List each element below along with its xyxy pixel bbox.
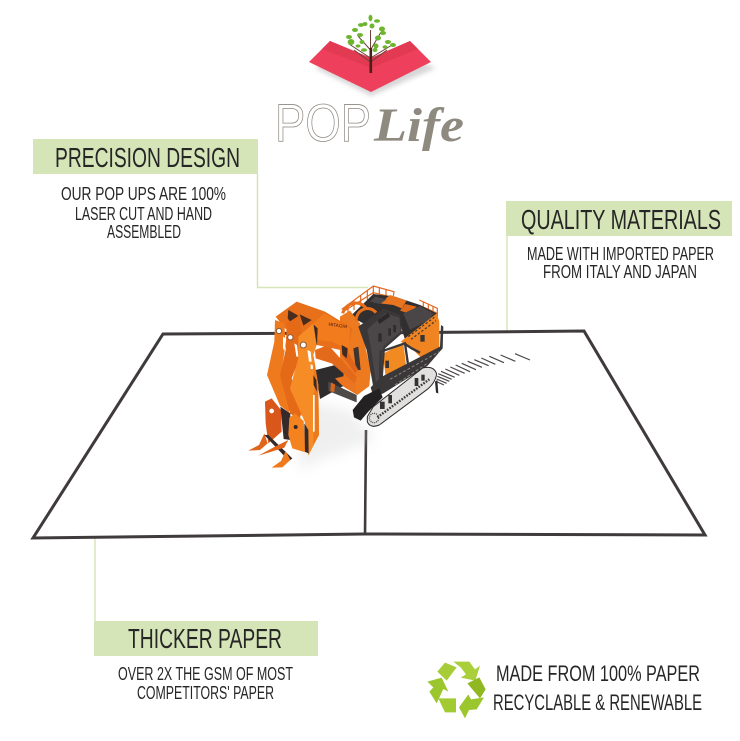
heading band: precision design: PRECISION DESIGN [55, 142, 240, 173]
callout: thicker paper [94, 621, 318, 703]
boom and bucket: HITACHI [328, 322, 347, 329]
orange rear shell [340, 311, 371, 395]
text: quality body [527, 244, 714, 282]
text: precision body: LASER CUT AND HAND [75, 204, 212, 224]
heading band: precision design [33, 139, 258, 174]
right orange panel [401, 313, 439, 360]
bucket left plate [265, 398, 282, 443]
middle arm [280, 315, 303, 419]
railing [342, 286, 437, 319]
logo wordmark Life: Life [373, 99, 464, 152]
front tooth [272, 451, 290, 468]
boom front plate [313, 313, 350, 350]
middle tooth [258, 440, 288, 456]
linkage bars [315, 345, 357, 383]
soft shadow [300, 400, 375, 470]
dark tower [358, 308, 402, 387]
recycling message [427, 661, 702, 718]
centre orange panel [383, 343, 406, 379]
text: thicker paper body [118, 664, 293, 703]
text: precision body [61, 184, 226, 242]
text: precision body: ASSEMBLED [107, 222, 181, 242]
rear cut-outs [353, 347, 361, 370]
cut shadow ticks [437, 354, 530, 385]
left arm [267, 320, 290, 412]
icon: open red book [309, 41, 436, 96]
heading band: thicker paper [94, 621, 318, 656]
open card outline [33, 331, 705, 538]
hoops [343, 303, 376, 321]
logo: Pop Life [275, 15, 464, 153]
deck interior [350, 294, 439, 345]
icon: tree [346, 15, 396, 73]
text: recycling message [493, 661, 702, 715]
under-boom dark block [316, 363, 345, 399]
arm white cut-outs and pins [276, 328, 315, 432]
callout: quality materials [506, 201, 732, 282]
left tooth [248, 433, 268, 451]
side frame [380, 343, 420, 378]
leader lines [95, 174, 507, 621]
boom top [276, 302, 352, 352]
pop-up excavator [248, 286, 530, 470]
heading band: thicker paper: THICKER PAPER [128, 623, 282, 654]
text: precision body: OUR POP UPS ARE 100% [61, 184, 226, 204]
pier [353, 388, 383, 421]
boom dark notches [288, 310, 298, 322]
callout: precision design [33, 139, 258, 242]
bucket front plate [288, 413, 306, 452]
bucket dark plate [280, 407, 290, 440]
logo wordmark POP: POP [275, 94, 371, 153]
crawler track [367, 367, 437, 426]
icon: recycle arrows [427, 662, 486, 718]
boom and bucket [248, 302, 357, 468]
text: thicker paper body: COMPETITORS' PAPER [137, 683, 274, 703]
text: thicker paper body: OVER 2X THE GSM OF MOST [118, 664, 293, 684]
right panel vents [408, 317, 436, 339]
machine body [340, 286, 443, 426]
front arm [290, 323, 319, 456]
